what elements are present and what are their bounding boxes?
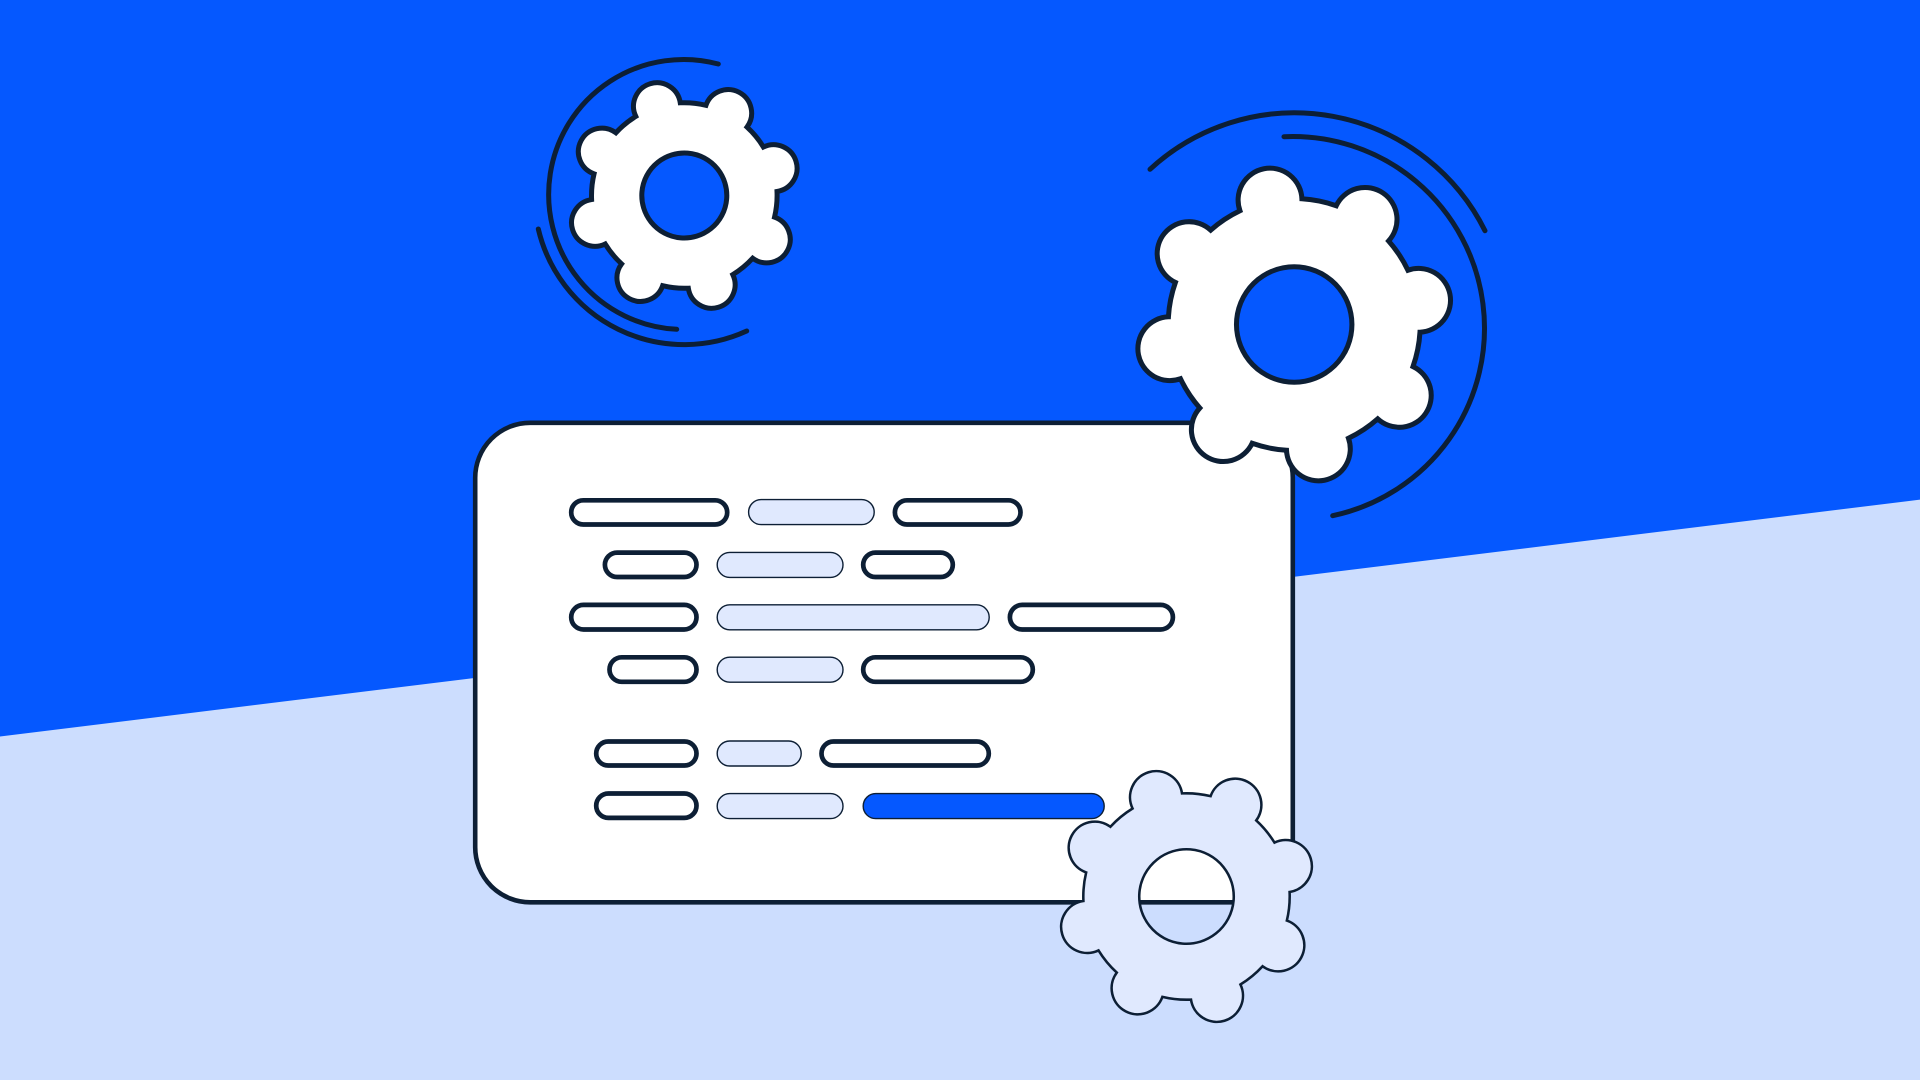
gear bbox=[538, 50, 830, 341]
panel: configuration card bbox=[475, 423, 1293, 902]
icon: large white gear with motion arcs bbox=[1108, 113, 1485, 516]
icon: small white gear with motion arcs bbox=[538, 50, 830, 345]
row 2 bbox=[605, 552, 953, 577]
row 5 bbox=[596, 741, 989, 766]
motion arc: outer bbox=[1150, 113, 1485, 231]
motion arc: outer bbox=[549, 59, 718, 329]
row 1 bbox=[571, 500, 1020, 525]
row 6 bbox=[596, 794, 1104, 819]
gear bbox=[1108, 138, 1480, 511]
background: light blue diagonal bbox=[0, 500, 1920, 1080]
highlighted blue bar bbox=[863, 794, 1104, 819]
motion arc: inner bbox=[1284, 136, 1485, 516]
row 4 bbox=[610, 657, 1033, 682]
motion arc: lower bbox=[538, 229, 747, 345]
card body bbox=[475, 423, 1293, 902]
row 3 bbox=[571, 605, 1173, 630]
icon: pale blue gear over card corner bbox=[1024, 734, 1349, 1059]
